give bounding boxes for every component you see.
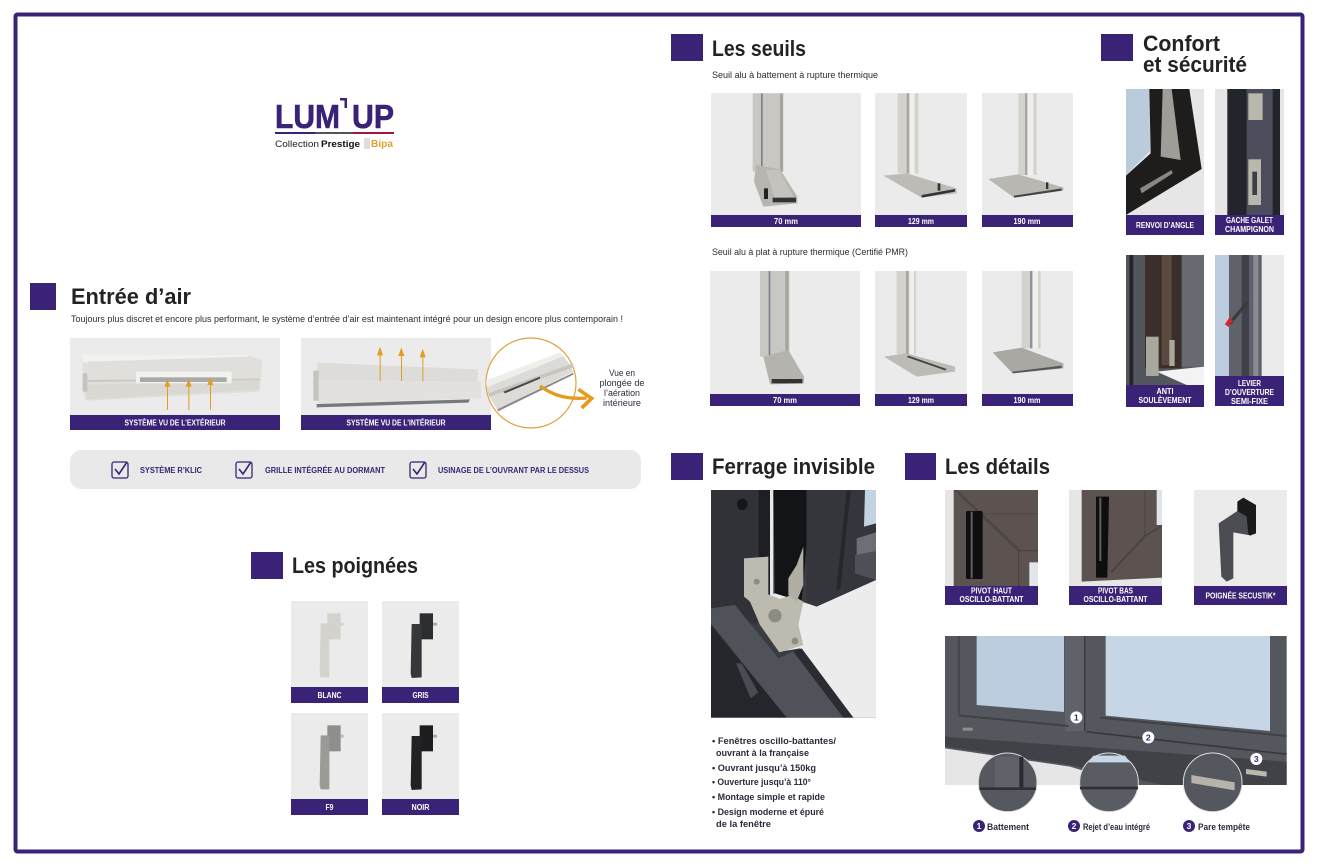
feature: integrated grille (236, 462, 385, 478)
legend: pare tempête: 3 (1187, 821, 1192, 831)
subheading: flat thresholds: Seuil alu à plat à rupture thermique (Certifié PMR) (712, 247, 908, 257)
caption: outside view (70, 415, 280, 430)
number markers on the photo: 2 (1146, 732, 1151, 742)
feature list: • Fenêtres oscillo-battantes/ (712, 736, 836, 747)
feature list: de la fenêtre (716, 819, 771, 830)
photo: corner transmission (1126, 89, 1204, 235)
heading: entrée d'air (30, 283, 191, 310)
photo: top pivot: PIVOT HAUT (971, 586, 1012, 596)
legend: rejet d'eau: Rejet d’eau intégré (1083, 822, 1150, 833)
panel: les seuils (671, 34, 1073, 406)
photo: window lower rail with numbered details (945, 636, 1287, 812)
feature strip (70, 450, 641, 489)
feature: R'Klic system: SYSTÈME R’KLIC (140, 466, 202, 475)
handle: grey: GRIS (412, 691, 429, 700)
photo: mushroom roller keep: GACHE GALET (1226, 216, 1273, 225)
handle: F9 (291, 713, 368, 815)
threshold: rebated 129 mm: 129 mm (908, 217, 934, 226)
legend: pare tempête: Pare tempête (1198, 822, 1250, 833)
heading: les poignées (251, 552, 418, 579)
logo: Lum'Up: Prestige (321, 139, 360, 150)
heading: les poignées: Les poignées (292, 553, 418, 578)
feature: R'Klic system (112, 462, 202, 478)
callout: top view of interior vent: intérieure (603, 398, 641, 409)
threshold: rebated 70 mm: 70 mm (774, 217, 798, 226)
feature list (712, 736, 836, 830)
number markers on the photo: 1 (1074, 712, 1079, 722)
callout: top view of interior vent: plongée de (600, 378, 644, 389)
caption: inside view: SYSTÈME VU DE L’INTÉRIEUR (346, 418, 446, 428)
photo: anti-lift device (1126, 255, 1204, 407)
legend: rejet d'eau (1068, 820, 1150, 833)
threshold: flat 70 mm (710, 271, 860, 406)
caption: outside view: SYSTÈME VU DE L’EXTÉRIEUR (124, 418, 226, 428)
threshold: flat 70 mm: 70 mm (773, 396, 797, 405)
number markers on the photo (1070, 711, 1262, 765)
threshold: rebated 70 mm (711, 93, 861, 227)
panel: les détails (905, 453, 1287, 833)
threshold: flat 129 mm (875, 271, 967, 406)
heading: les seuils: Les seuils (712, 36, 806, 61)
feature list: • Design moderne et épuré (712, 807, 824, 818)
photo: semi-fixed opening lever (1215, 255, 1284, 406)
threshold: rebated 190 mm (982, 93, 1073, 227)
intro text: Toujours plus discret et encore plus performant, le système d’entrée d’air est maintenant intégré pour un design encore plus contemporain ! (71, 314, 623, 324)
heading: entrée d'air: Entrée d’air (71, 284, 191, 309)
photo: top pivot: OSCILLO-BATTANT (960, 595, 1024, 604)
panel: confort et sécurité (1101, 31, 1284, 407)
callout: top view of interior vent: l’aération (604, 388, 640, 399)
caption: inside view (301, 415, 491, 430)
feature list: • Ouvrant jusqu’à 150kg (712, 763, 816, 774)
feature: machining from above (410, 462, 590, 478)
heading: confort et sécurité (1101, 31, 1247, 77)
photo: anti-lift device: SOULÈVEMENT (1138, 396, 1192, 405)
photo: semi-fixed opening lever: SEMI-FIXE (1231, 397, 1269, 406)
heading: confort et sécurité: Confort (1143, 31, 1220, 56)
photo: system seen from outside (70, 338, 280, 415)
photo: system seen from inside (301, 338, 491, 415)
photo: anti-lift device: ANTI (1156, 387, 1174, 396)
feature: machining from above: USINAGE DE L’OUVRANT PAR LE DESSUS (438, 466, 590, 475)
callout: top view of interior vent: Vue en (609, 368, 635, 379)
photo: Secustik handle: POIGNÉE SECUSTIK* (1206, 592, 1276, 600)
photo: semi-fixed opening lever: LEVIER (1238, 379, 1261, 388)
threshold: rebated 190 mm: 190 mm (1014, 217, 1040, 226)
logo: Lum'Up: UP (352, 98, 394, 135)
panel: ferrage invisible (671, 453, 876, 830)
legend: pare tempête (1183, 820, 1250, 833)
handle: white: BLANC (318, 691, 342, 700)
handle: white (291, 601, 368, 703)
handle: black: NOIR (412, 803, 430, 812)
handle: F9: F9 (326, 803, 334, 812)
photo: top pivot (945, 490, 1038, 605)
heading: les détails (905, 453, 1050, 480)
logo: Lum'Up: LUM (275, 98, 340, 135)
feature list: • Montage simple et rapide (712, 792, 825, 803)
detail callout circles (978, 753, 1242, 812)
legend: battement: Battement (987, 822, 1030, 833)
heading: les seuils (671, 34, 806, 61)
photo: bottom pivot (1069, 490, 1162, 605)
photo: mushroom roller keep (1215, 89, 1284, 235)
threshold: flat 129 mm: 129 mm (908, 396, 934, 405)
legend: battement (973, 820, 1030, 833)
heading: ferrage invisible (671, 453, 875, 480)
photo: concealed hinge (711, 490, 876, 718)
logo: Lum'Up (275, 98, 394, 150)
photo: semi-fixed opening lever: D’OUVERTURE (1225, 388, 1275, 397)
legend: battement: 1 (977, 821, 982, 831)
panel: les poignées (251, 552, 459, 815)
photo: Secustik handle (1194, 490, 1287, 605)
heading: confort et sécurité: et sécurité (1143, 52, 1247, 77)
photo: mushroom roller keep: CHAMPIGNON (1225, 225, 1274, 234)
threshold: rebated 129 mm (875, 93, 967, 227)
legend: rejet d'eau: 2 (1072, 821, 1077, 831)
photo: bottom pivot: OSCILLO-BATTANT (1084, 595, 1148, 604)
handle: grey (382, 601, 459, 703)
magnified view of the air inlet (486, 338, 592, 428)
heading: les détails: Les détails (945, 454, 1050, 479)
logo: Lum'Up: Collection (275, 139, 319, 150)
feature: integrated grille: GRILLE INTÉGRÉE AU DORMANT (265, 466, 385, 475)
subheading: rebated thresholds: Seuil alu à battement à rupture thermique (712, 70, 878, 80)
callout: top view of interior vent (600, 368, 644, 409)
panel: entrée d'air (30, 283, 644, 489)
feature list: • Ouverture jusqu’à 110° (712, 777, 811, 788)
handle: black (382, 713, 459, 815)
logo: Lum'Up: Bipa (371, 138, 393, 150)
feature list: ouvrant à la française (716, 748, 809, 759)
photo: bottom pivot: PIVOT BAS (1098, 586, 1134, 596)
photo: corner transmission: RENVOI D’ANGLE (1136, 221, 1195, 230)
number markers on the photo: 3 (1254, 754, 1259, 764)
threshold: flat 190 mm: 190 mm (1014, 396, 1040, 405)
heading: ferrage invisible: Ferrage invisible (712, 454, 875, 479)
threshold: flat 190 mm (982, 271, 1073, 406)
